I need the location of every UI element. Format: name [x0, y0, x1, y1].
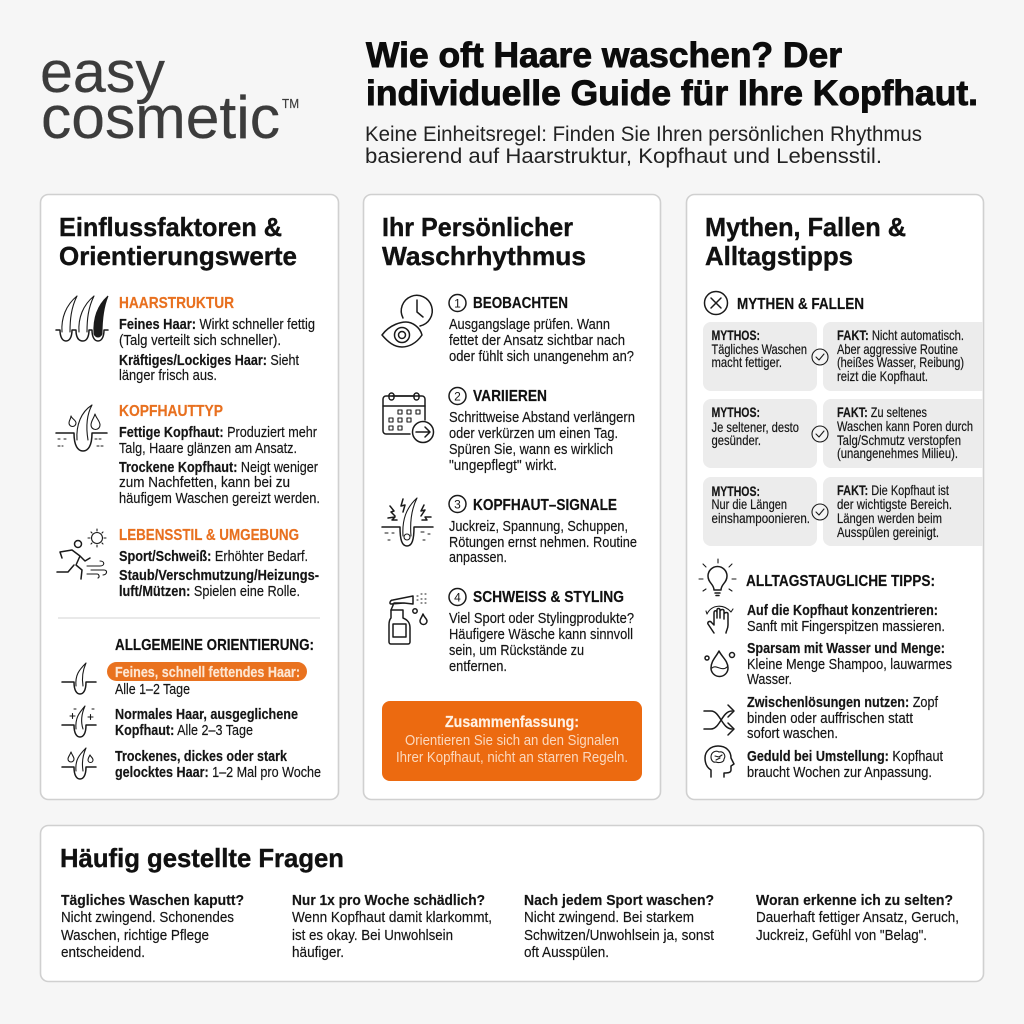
text block: Kopfhauttyp: Fettige Kopfhaut: Produziert mehr	[119, 424, 317, 441]
icon: dry hair follicle with drops	[62, 748, 96, 779]
row 2: myth and fact: gesünder.	[712, 432, 761, 448]
icon: scalp follicle with drops	[56, 405, 107, 451]
step 3: Kopfhaut-Signale: anpassen.	[449, 549, 507, 566]
icon: normal hair follicle with sparkles	[62, 706, 96, 737]
text block: Lebensstil und Umgebung: LEBENSSTIL & UMGEBUNG	[119, 527, 299, 544]
row 1: myth and fact: reizt die Kopfhaut.	[837, 368, 928, 384]
FAQ 2: Wenn Kopfhaut damit klarkommt,	[292, 909, 492, 926]
icon: light bulb	[699, 559, 736, 596]
step 4: Schweiss und Styling: sein, um Rückstände zu	[449, 642, 584, 659]
heading: Mythen: Mythen, Fallen &	[705, 212, 906, 242]
text block: Kopfhauttyp: Talg, Haare glänzen am Ansatz.	[119, 440, 297, 457]
row 3: myth and fact: Längen werden beim	[837, 510, 942, 526]
FAQ 3: oft Ausspülen.	[524, 944, 609, 961]
row 1: myth and fact: FAKT: Nicht automatisch.	[837, 327, 964, 343]
row 1: myth and fact	[703, 322, 983, 391]
row 2: myth and fact: Waschen kann Poren durch	[837, 418, 973, 434]
step 4: Schweiss und Styling: entfernen.	[449, 658, 507, 675]
text block: Kopfhauttyp: KOPFHAUTTYP	[119, 403, 223, 420]
step 1: Beobachten: oder fühlt sich unangenehm an?	[449, 348, 634, 365]
icon: spray bottle	[389, 594, 427, 644]
FAQ 3: Nach jedem Sport waschen?	[524, 892, 714, 909]
heading: Mythen	[705, 212, 906, 271]
heading: Einflussfaktoren: Einflussfaktoren &	[59, 212, 282, 242]
step 2: Variieren: 2	[454, 390, 461, 404]
FAQ 4: Juckreiz, Gefühl von "Belag".	[756, 927, 927, 944]
heading: Alltagstaugliche Tipps: ALLTAGSTAUGLICHE TIPPS:	[746, 573, 935, 590]
text: Alle 1-2 Tage: Alle 1–2 Tage	[115, 681, 190, 698]
step 2: Variieren: oder verkürzen um einen Tag.	[449, 425, 618, 442]
panel: Häufig gestellte Fragen	[40, 826, 984, 982]
tip: Zwischenlösungen: Zwischenlösungen nutzen: Zopf	[747, 694, 939, 711]
FAQ 1: Nicht zwingend. Schonendes	[61, 909, 234, 926]
subtitle	[365, 123, 922, 168]
tip: Kopfhaut: Auf die Kopfhaut konzentrieren:	[747, 602, 938, 619]
step 3: Kopfhaut-Signale	[449, 496, 637, 566]
step 2: Variieren: Schrittweise Abstand verlängern	[449, 409, 635, 426]
step 4: Schweiss und Styling: SCHWEISS & STYLING	[473, 589, 624, 606]
row 2: myth and fact: FAKT: Zu seltenes	[837, 404, 927, 420]
icon: three hair follicles	[56, 296, 108, 341]
callout: Zusammenfassung	[382, 701, 642, 781]
icon: crossing arrows	[704, 705, 734, 735]
row 3: myth and fact: einshampoonieren.	[712, 510, 810, 526]
FAQ 1: Tägliches Waschen kaputt?	[61, 892, 244, 909]
subtitle: basierend auf Haarstruktur, Kopfhaut und Lebensstil.	[365, 145, 882, 168]
tip: Zwischenlösungen: binden oder auffrischen statt	[747, 710, 914, 727]
step 2: Variieren: "ungepflegt" wirkt.	[449, 457, 557, 474]
FAQ 3: Nicht zwingend. Bei starkem	[524, 909, 694, 926]
text block: Kopfhauttyp: Trockene Kopfhaut: Neigt weniger	[119, 459, 318, 476]
row 2: myth and fact: MYTHOS:	[712, 404, 760, 420]
row 2: myth and fact: (unangenehmes Milieu).	[837, 445, 958, 461]
tip: Kopfhaut	[747, 602, 945, 635]
text block: Lebensstil und Umgebung: luft/Mützen: Spielen eine Rolle.	[119, 583, 300, 600]
heading: Waschrhythmus: Ihr Persönlicher	[382, 212, 573, 242]
text block: Lebensstil und Umgebung	[119, 527, 319, 600]
row 2: myth and fact: Talg/Schmutz verstopfen	[837, 432, 961, 448]
heading: FAQ: Häufig gestellte Fragen	[60, 843, 344, 873]
heading: Einflussfaktoren	[59, 212, 297, 271]
highlight pill: Feines, schnell fettendes Haar: Feines, schnell fettendes Haar:	[115, 664, 300, 681]
callout: Zusammenfassung: Zusammenfassung:	[445, 714, 579, 731]
callout: Zusammenfassung: Ihrer Kopfhaut, nicht an starren Regeln.	[396, 749, 628, 766]
icon: head with brain	[705, 746, 734, 777]
tip: Sparsam: Sparsam mit Wasser und Menge:	[747, 640, 945, 657]
row 3: myth and fact: FAKT: Die Kopfhaut ist	[837, 482, 949, 498]
icon: fine hair follicle	[62, 663, 96, 694]
icon: irritated scalp with lightning	[382, 498, 433, 546]
panel: Einflussfaktoren und Orientierungswerte	[40, 194, 338, 800]
FAQ 4: Dauerhaft fettiger Ansatz, Geruch,	[756, 909, 959, 926]
panel: Ihr persönlicher Waschrhythmus	[364, 194, 660, 800]
logo: easy cosmetic: TM	[282, 96, 299, 111]
row 1: myth and fact: Tägliches Waschen	[712, 341, 807, 357]
FAQ 3: Schwitzen/Unwohlsein ja, sonst	[524, 927, 715, 944]
step 1: Beobachten: 1	[454, 296, 461, 310]
heading: Waschrhythmus: Waschrhythmus	[382, 241, 586, 271]
step 2: Variieren	[449, 388, 635, 474]
step 3: Kopfhaut-Signale: 3	[454, 498, 461, 512]
step 4: Schweiss und Styling: 4	[454, 590, 461, 604]
subtitle: Keine Einheitsregel: Finden Sie Ihren persönlichen Rhythmus	[365, 123, 922, 146]
text block: Kopfhauttyp	[119, 403, 320, 507]
step 3: Kopfhaut-Signale: Rötungen ernst nehmen. Routine	[449, 534, 637, 551]
row 2: myth and fact: Je seltener, desto	[712, 419, 799, 435]
icon: eye and clock	[382, 295, 432, 347]
row 1: myth and fact: (heißes Wasser, Reibung)	[837, 354, 964, 370]
text block: Haarstruktur: HAARSTRUKTUR	[119, 295, 234, 312]
icon: crossed circle	[704, 292, 728, 314]
tip: Sparsam: Kleine Menge Shampoo, lauwarmes	[747, 656, 952, 673]
text: Trockenes Haar: gelocktes Haar: 1–2 Mal pro Woche	[115, 764, 321, 781]
row 1: myth and fact: macht fettiger.	[712, 354, 782, 370]
text: Trockenes Haar: Trockenes, dickes oder stark	[115, 748, 288, 765]
FAQ 4	[756, 892, 959, 944]
FAQ 1: Waschen, richtige Pflege	[61, 927, 209, 944]
tip: Zwischenlösungen: sofort waschen.	[747, 725, 838, 742]
text: Trockenes Haar	[115, 748, 321, 781]
row 3: myth and fact: der wichtigste Bereich.	[837, 496, 952, 512]
text: Normales Haar	[115, 706, 298, 739]
step 2: Variieren: Spüren Sie, wann es wirklich	[449, 441, 613, 458]
icon: runner with sun and wind	[57, 529, 107, 579]
heading: Mythen: Alltagstipps	[705, 241, 853, 271]
tip: Sparsam	[747, 640, 952, 688]
text block: Haarstruktur: Kräftiges/Lockiges Haar: Sieht	[119, 352, 300, 369]
text block: Kopfhauttyp: häufigem Waschen gereizt werden.	[119, 490, 320, 507]
FAQ 2: Nur 1x pro Woche schädlich?	[292, 892, 485, 909]
logo: easy cosmetic: easy	[40, 40, 165, 105]
FAQ 3	[524, 892, 715, 961]
step 1: Beobachten	[449, 294, 634, 365]
text block: Haarstruktur: (Talg verteilt sich schneller).	[119, 332, 281, 349]
FAQ 1	[61, 892, 244, 961]
title: individuelle Guide für Ihre Kopfhaut.	[366, 74, 978, 113]
tip: Zwischenlösungen	[747, 694, 939, 742]
row 3: myth and fact	[703, 477, 983, 546]
FAQ 1: entscheidend.	[61, 944, 145, 961]
row 1: myth and fact: Aber aggressive Routine	[837, 341, 958, 357]
tip: Geduld: Geduld bei Umstellung: Kopfhaut	[747, 748, 944, 765]
row 3: myth and fact: Nur die Längen	[712, 496, 787, 512]
text block: Lebensstil und Umgebung: Sport/Schweiß: Erhöhter Bedarf.	[119, 548, 308, 565]
title: Wie oft Haare waschen? Der	[366, 36, 842, 75]
row 3: myth and fact: Ausspülen gereinigt.	[837, 524, 939, 540]
heading: Mythen und Fallen: MYTHEN & FALLEN	[737, 296, 864, 313]
row 1: myth and fact: MYTHOS:	[712, 327, 760, 343]
icon: water drops	[705, 651, 734, 676]
logo: easy cosmetic	[40, 40, 299, 151]
step 4: Schweiss und Styling: Viel Sport oder Stylingprodukte?	[449, 610, 634, 627]
text block: Haarstruktur	[119, 295, 315, 384]
tip: Kopfhaut: Sanft mit Fingerspitzen massieren.	[747, 618, 945, 635]
step 3: Kopfhaut-Signale: Juckreiz, Spannung, Schuppen,	[449, 518, 628, 535]
FAQ 2: ist es okay. Bei Unwohlsein	[292, 927, 453, 944]
row 2: myth and fact	[703, 399, 983, 468]
FAQ 4: Woran erkenne ich zu selten?	[756, 892, 953, 909]
step 4: Schweiss und Styling	[449, 588, 634, 675]
text block: Kopfhauttyp: zum Nachfetten, kann bei zu	[119, 474, 290, 491]
logo: easy cosmetic: cosmetic	[41, 84, 280, 151]
icon: calendar with arrow	[383, 393, 434, 442]
step 4: Schweiss und Styling: Häufigere Wäsche kann sinnvoll	[449, 626, 633, 643]
step 3: Kopfhaut-Signale: KOPFHAUT–SIGNALE	[473, 497, 617, 514]
tip: Geduld	[747, 748, 944, 781]
text block: Haarstruktur: Feines Haar: Wirkt schneller fettig	[119, 316, 315, 333]
FAQ 2	[292, 892, 492, 961]
tip: Sparsam: Wasser.	[747, 671, 792, 688]
row 3: myth and fact: MYTHOS:	[712, 483, 760, 499]
step 1: Beobachten: Ausgangslage prüfen. Wann	[449, 316, 610, 333]
FAQ 2: häufiger.	[292, 944, 344, 961]
step 1: Beobachten: fettet der Ansatz sichtbar nach	[449, 332, 625, 349]
heading: Einflussfaktoren: Orientierungswerte	[59, 241, 297, 271]
title	[366, 36, 978, 113]
icon: massaging hand	[706, 606, 733, 633]
panel: Mythen, Fallen und Alltagstipps	[686, 194, 984, 800]
tip: Geduld: braucht Wochen zur Anpassung.	[747, 764, 932, 781]
heading: Allgemeine Orientierung: ALLGEMEINE ORIENTIERUNG:	[115, 637, 314, 654]
text: Normales Haar: Kopfhaut: Alle 2–3 Tage	[115, 722, 253, 739]
heading: Waschrhythmus	[382, 212, 586, 271]
callout: Zusammenfassung: Orientieren Sie sich an den Signalen	[405, 732, 619, 749]
step 2: Variieren: VARIIEREN	[473, 388, 547, 405]
text: Normales Haar: Normales Haar, ausgeglichene	[115, 706, 298, 723]
text block: Haarstruktur: länger frisch aus.	[119, 367, 217, 384]
step 1: Beobachten: BEOBACHTEN	[473, 295, 568, 312]
text block: Lebensstil und Umgebung: Staub/Verschmutzung/Heizungs-	[119, 567, 319, 584]
